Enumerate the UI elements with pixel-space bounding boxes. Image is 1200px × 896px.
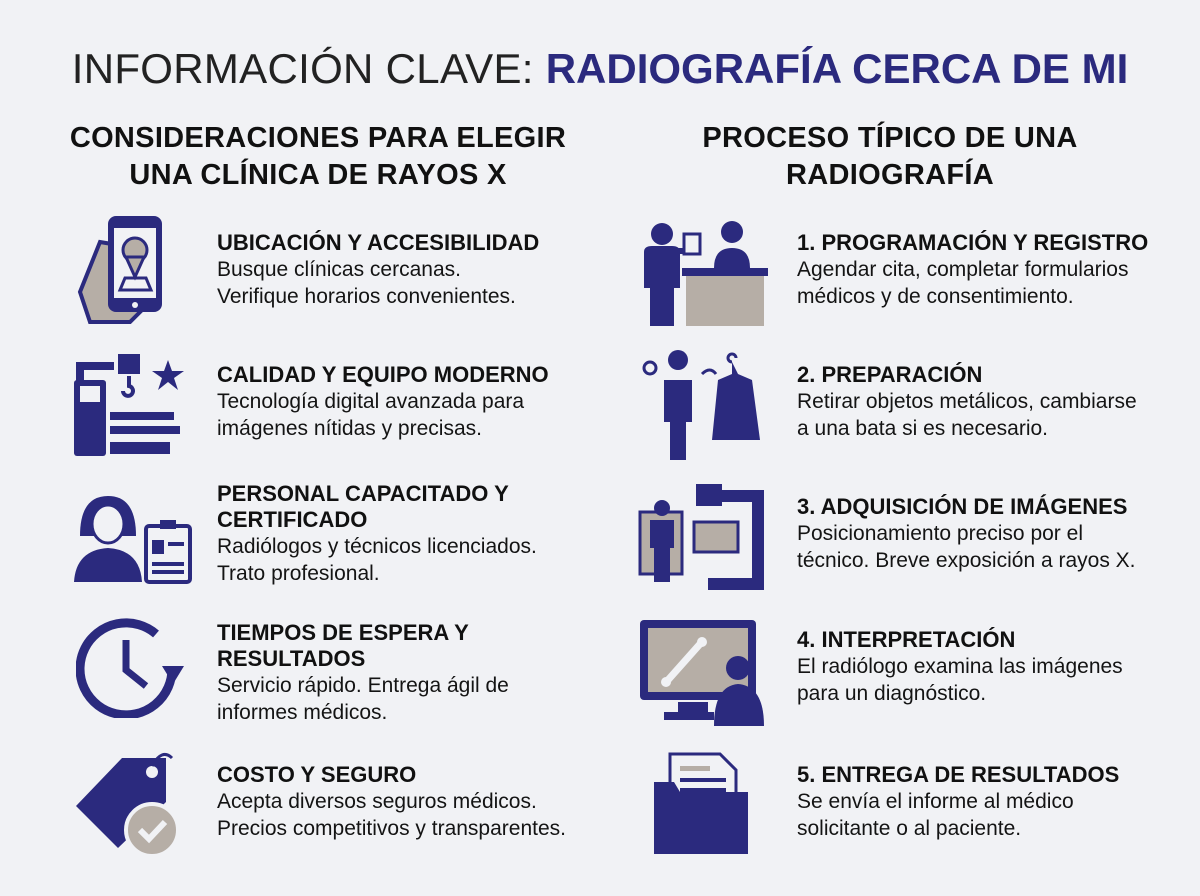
item: calidad: Tecnología digital avanzada para — [217, 390, 524, 413]
item: personal — [217, 481, 537, 585]
item: costo — [217, 762, 566, 840]
item: calidad: CALIDAD Y EQUIPO MODERNO — [217, 362, 549, 387]
item: costo: Acepta diversos seguros médicos. — [217, 790, 537, 813]
item: programación: 1. PROGRAMACIÓN Y REGISTRO — [797, 230, 1148, 255]
item: calidad — [217, 362, 549, 440]
icon: registration — [644, 221, 768, 326]
item: costo: COSTO Y SEGURO — [217, 762, 416, 787]
item: preparación: 2. PREPARACIÓN — [797, 362, 982, 387]
heading: considerations — [70, 122, 566, 191]
item: tiempos: informes médicos. — [217, 701, 387, 724]
icon: preparation — [642, 350, 760, 460]
item: preparación: Retirar objetos metálicos, cambiarse — [797, 390, 1137, 413]
item: calidad: imágenes nítidas y precisas. — [217, 417, 482, 440]
item: preparación: a una bata si es necesario. — [797, 417, 1048, 440]
heading: process: RADIOGRAFÍA — [786, 159, 994, 191]
heading: process: PROCESO TÍPICO DE UNA — [702, 122, 1078, 154]
item: preparación — [797, 362, 1137, 440]
icon: equipment — [74, 354, 184, 456]
heading: process — [702, 122, 1078, 191]
icon: folder with document — [654, 752, 748, 854]
item: programación: Agendar cita, completar formularios — [797, 258, 1128, 281]
item: programación: médicos y de consentimiento. — [797, 285, 1074, 308]
item: ubicación: Busque clínicas cercanas. — [217, 258, 461, 281]
item: adquisición: Posicionamiento preciso por el — [797, 522, 1083, 545]
heading: considerations: CONSIDERACIONES PARA ELEGIR — [70, 122, 566, 154]
item: ubicación: UBICACIÓN Y ACCESIBILIDAD — [217, 230, 539, 255]
item: tiempos: RESULTADOS — [217, 646, 365, 671]
item: personal: Radiólogos y técnicos licenciados. — [217, 535, 537, 558]
icon: phone with map — [78, 216, 162, 324]
item: adquisición — [797, 494, 1136, 572]
item: ubicación — [217, 230, 539, 308]
item: personal: PERSONAL CAPACITADO Y — [217, 481, 509, 506]
item: tiempos: Servicio rápido. Entrega ágil de — [217, 674, 509, 697]
item: entrega: 5. ENTREGA DE RESULTADOS — [797, 762, 1119, 787]
item: tiempos — [217, 620, 509, 724]
item: interpretación: El radiólogo examina las imágenes — [797, 655, 1123, 678]
item: interpretación — [797, 627, 1123, 705]
item: programación — [797, 230, 1148, 308]
item: costo: Precios competitivos y transparentes. — [217, 817, 566, 840]
item: entrega: solicitante o al paciente. — [797, 817, 1021, 840]
item: interpretación: 4. INTERPRETACIÓN — [797, 627, 1015, 652]
item: entrega — [797, 762, 1119, 840]
item: adquisición: 3. ADQUISICIÓN DE IMÁGENES — [797, 494, 1127, 519]
item: interpretación: para un diagnóstico. — [797, 682, 986, 705]
item: ubicación: Verifique horarios convenientes. — [217, 285, 516, 308]
item: personal: Trato profesional. — [217, 562, 380, 585]
icon: monitor with radiologist — [640, 620, 764, 726]
item: tiempos: TIEMPOS DE ESPERA Y — [217, 620, 469, 645]
item: personal: CERTIFICADO — [217, 507, 367, 532]
icon: clock — [76, 618, 184, 718]
icon: x-ray machine — [638, 484, 764, 590]
title: INFORMACIÓN CLAVE: RADIOGRAFÍA CERCA DE MI — [72, 45, 1128, 92]
icon: price tag — [76, 752, 176, 854]
icon: staff — [74, 496, 192, 584]
item: adquisición: técnico. Breve exposición a rayos X. — [797, 549, 1136, 572]
item: entrega: Se envía el informe al médico — [797, 790, 1074, 813]
heading: considerations: UNA CLÍNICA DE RAYOS X — [129, 159, 507, 191]
